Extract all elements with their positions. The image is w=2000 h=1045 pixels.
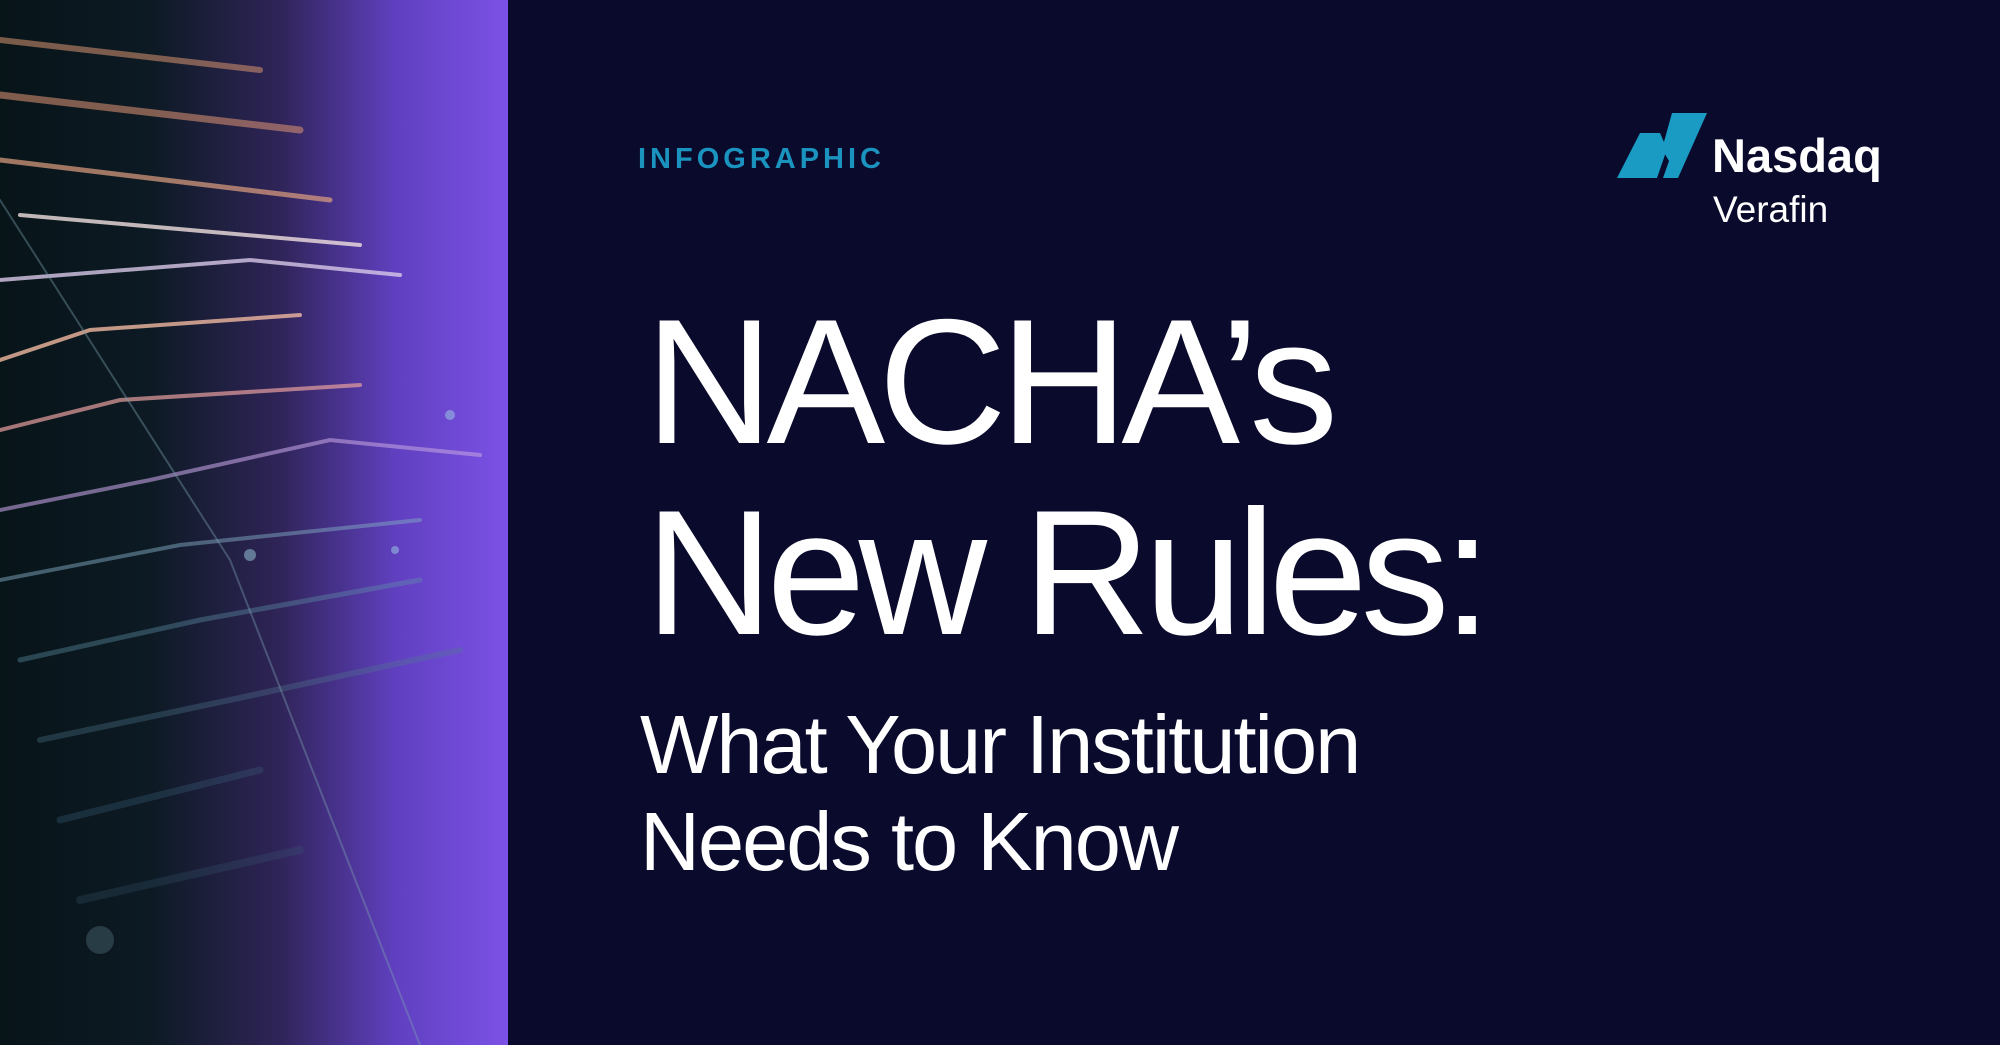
subtitle bbox=[640, 698, 1359, 888]
text: Verafin: Verafin bbox=[1713, 189, 1828, 230]
title: NACHA’s bbox=[645, 282, 1331, 481]
subtitle: Needs to Know bbox=[640, 795, 1177, 888]
label: INFOGRAPHIC: INFOGRAPHIC bbox=[638, 143, 885, 175]
panel: left decorative image bbox=[0, 0, 508, 1045]
subtitle: What Your Institution bbox=[640, 698, 1359, 791]
title: New Rules: bbox=[645, 473, 1485, 672]
text: Nasdaq: Nasdaq bbox=[1712, 129, 1882, 182]
logo: Nasdaq Verafin bbox=[1617, 113, 1882, 230]
icon: Nasdaq N mark bbox=[1617, 113, 1707, 178]
title bbox=[645, 282, 1485, 672]
